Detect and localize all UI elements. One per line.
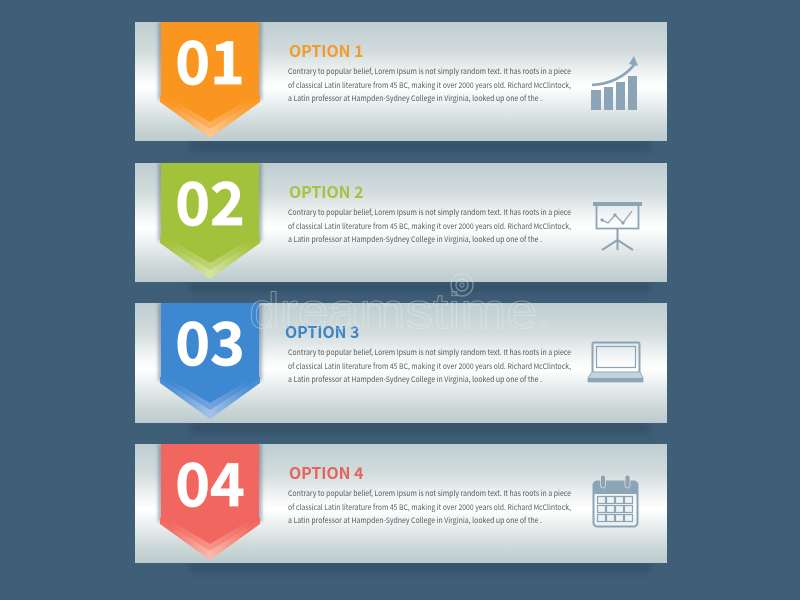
icon: presentation board [593, 202, 642, 250]
ribbon 4 [158, 438, 262, 560]
heading: option 1: OPTION 1 [289, 39, 363, 62]
body text 2 [288, 207, 571, 245]
body text 2: a Latin professor at Hampden-Sydney College in Virginia, looked up one of the . [288, 234, 542, 245]
body text 3: a Latin professor at Hampden-Sydney College in Virginia, looked up one of the . [288, 374, 542, 385]
body text 4: Contrary to popular belief, Lorem Ipsum is not simply random text. It has roots in a piece [288, 488, 571, 499]
number 01: 01 [175, 16, 245, 101]
ribbon 2 [158, 157, 262, 279]
number 04: 04 [175, 438, 245, 523]
body text 1 [288, 66, 571, 104]
body text 3: of classical Latin literature from 45 BC, making it over 2000 years old. Richard McClintock, [288, 361, 571, 372]
body text 3 [288, 347, 571, 385]
panel 4: option 4 [135, 438, 667, 572]
icon: rising bar chart [591, 56, 638, 110]
ribbon 3 [158, 297, 262, 419]
body text 4: of classical Latin literature from 45 BC, making it over 2000 years old. Richard McClintock, [288, 502, 571, 513]
body text 1: a Latin professor at Hampden-Sydney College in Virginia, looked up one of the . [288, 93, 542, 104]
body text 2: Contrary to popular belief, Lorem Ipsum is not simply random text. It has roots in a piece [288, 207, 571, 218]
number 03: 03 [175, 297, 245, 382]
body text 1: Contrary to popular belief, Lorem Ipsum is not simply random text. It has roots in a piece [288, 66, 571, 77]
body text 4: a Latin professor at Hampden-Sydney College in Virginia, looked up one of the . [288, 515, 542, 526]
watermark: dreamstime [249, 283, 537, 339]
heading: option 3: OPTION 3 [285, 320, 359, 343]
body text 1: of classical Latin literature from 45 BC, making it over 2000 years old. Richard McClintock, [288, 80, 571, 91]
body text 2: of classical Latin literature from 45 BC, making it over 2000 years old. Richard McClintock, [288, 221, 571, 232]
icon: laptop [588, 342, 643, 382]
icon: calendar [593, 475, 638, 526]
body text 4 [288, 488, 571, 526]
heading: option 4: OPTION 4 [289, 461, 363, 484]
ribbon 1 [158, 16, 262, 138]
panel 1: option 1 [135, 16, 667, 151]
panel 2: option 2 [135, 157, 667, 292]
number 02: 02 [175, 157, 245, 242]
body text 3: Contrary to popular belief, Lorem Ipsum is not simply random text. It has roots in a piece [288, 347, 571, 358]
panel 3: option 3 [135, 297, 667, 433]
heading: option 2: OPTION 2 [289, 180, 363, 203]
watermark: ® [539, 317, 548, 331]
